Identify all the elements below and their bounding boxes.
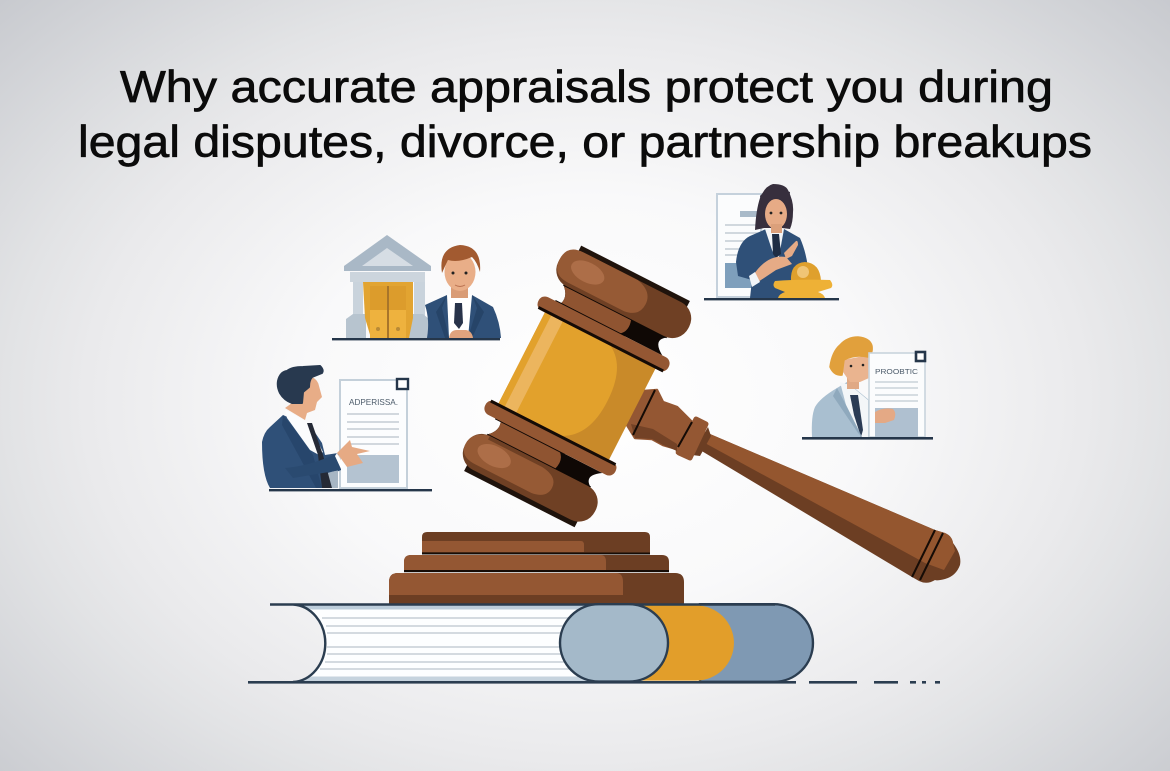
book top edge and spine curve [270, 604, 775, 682]
gavel top cap [550, 240, 700, 344]
icon: man in suit [425, 245, 501, 338]
vignette: woman with bell [704, 184, 839, 300]
icon: bank building [344, 235, 431, 338]
book end cap [560, 604, 668, 682]
gavel sound block [389, 532, 684, 604]
icon: bell [774, 262, 832, 298]
icon: document [717, 194, 762, 297]
icon: document: PROOBTIC [875, 369, 918, 376]
gavel handle [627, 390, 960, 583]
book cover [700, 604, 813, 682]
ground line [802, 437, 933, 440]
icon: appraisal document: ADPERISSA. [349, 397, 398, 407]
ground line and dashes [248, 681, 940, 684]
icon: person with blond hair [812, 337, 872, 437]
gavel collars [482, 294, 672, 478]
gavel bottom cap [454, 428, 604, 532]
ground line [332, 338, 500, 340]
book [248, 604, 940, 684]
icon: man in suit [262, 366, 370, 488]
ground line [269, 489, 432, 491]
title: Why accurate appraisals protect you during [120, 63, 1053, 112]
yellow book band [640, 605, 734, 681]
gavel body [498, 312, 656, 460]
ground line [704, 298, 839, 300]
gavel knob [627, 390, 711, 458]
icon: appraisal document [340, 379, 408, 488]
icon: woman in suit [736, 184, 809, 298]
vignette: man presenting appraisal [262, 366, 432, 491]
vignette: probate document [802, 337, 933, 440]
title [78, 63, 1092, 167]
book pages [293, 605, 605, 681]
title: legal disputes, divorce, or partnership breakups [78, 118, 1092, 167]
gavel necks [487, 285, 670, 489]
vignette: bank and advisor [332, 235, 501, 340]
gavel head [454, 240, 700, 532]
